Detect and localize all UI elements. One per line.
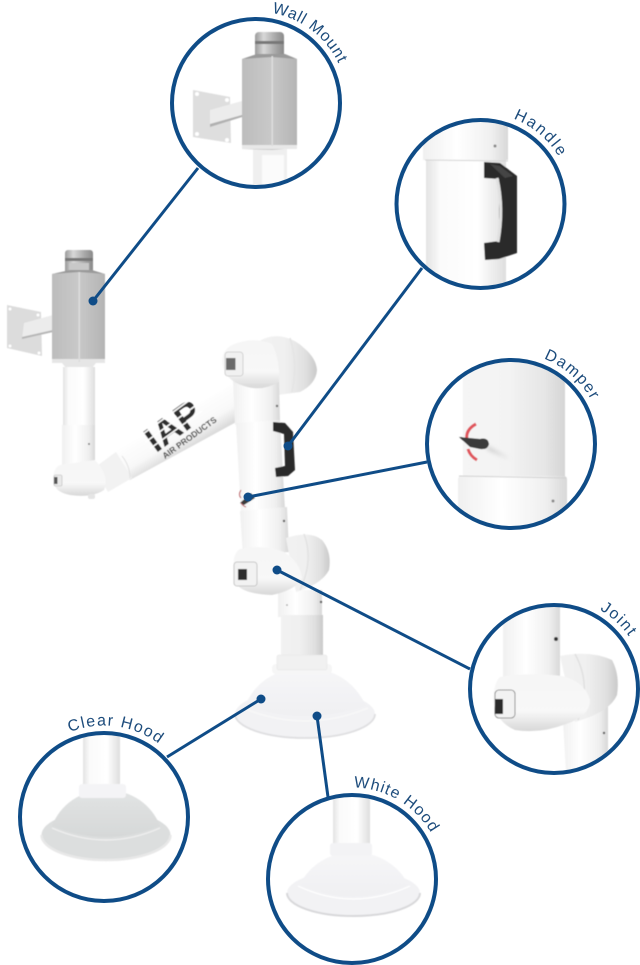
front lower joint xyxy=(234,547,302,595)
wall mount ring xyxy=(172,19,340,187)
joint ring xyxy=(470,605,638,773)
damper label: Damper xyxy=(545,349,598,398)
white hood image xyxy=(287,795,420,916)
damper ring xyxy=(427,360,595,528)
lower arm pipe xyxy=(236,420,285,512)
lower pipe xyxy=(278,590,323,657)
leader: joint xyxy=(272,566,470,669)
clear hood image xyxy=(42,733,170,860)
leader: clear hood xyxy=(167,694,266,757)
panel: clear hood detail xyxy=(18,716,190,903)
panel: damper detail xyxy=(425,349,598,530)
rear lower joint xyxy=(286,534,330,592)
clear hood label: Clear Hood xyxy=(68,716,164,743)
wall mount label: Wall Mount xyxy=(274,2,347,64)
handle image xyxy=(423,118,517,290)
main handle xyxy=(273,422,295,477)
top joint body xyxy=(222,340,279,388)
hood xyxy=(235,655,375,738)
damper image xyxy=(458,358,567,532)
leader: handle xyxy=(284,268,422,450)
wall mount box xyxy=(52,270,105,364)
IAP logo: AIR PRODUCTS xyxy=(160,414,219,461)
clear hood ring xyxy=(20,733,188,901)
leader: wall mount xyxy=(88,168,198,306)
panel: wall mount detail xyxy=(170,2,347,189)
leader: white hood xyxy=(312,712,328,797)
upper arm collar xyxy=(233,380,280,425)
lower arm collar xyxy=(240,507,289,556)
upper vertical pipe xyxy=(62,363,96,467)
main arm section xyxy=(94,384,240,492)
rear top joint cylinder xyxy=(258,336,317,396)
white hood label: White Hood xyxy=(354,776,440,832)
joint image xyxy=(493,600,618,772)
handle label: Handle xyxy=(514,109,564,155)
IAP logo: IAP xyxy=(136,391,209,460)
panel: joint detail xyxy=(468,602,640,775)
fume extraction arm product xyxy=(7,250,375,738)
leader: damper xyxy=(244,462,427,502)
handle ring xyxy=(396,120,564,288)
duct spigot xyxy=(65,250,93,274)
panel: white hood detail xyxy=(266,776,440,965)
wall bracket plate xyxy=(7,305,53,356)
panel: handle detail xyxy=(394,109,566,290)
damper lever xyxy=(240,490,255,507)
wall mount image xyxy=(193,32,297,187)
white hood ring xyxy=(268,795,436,963)
lower left elbow joint xyxy=(53,460,106,499)
joint label: Joint xyxy=(601,602,636,636)
